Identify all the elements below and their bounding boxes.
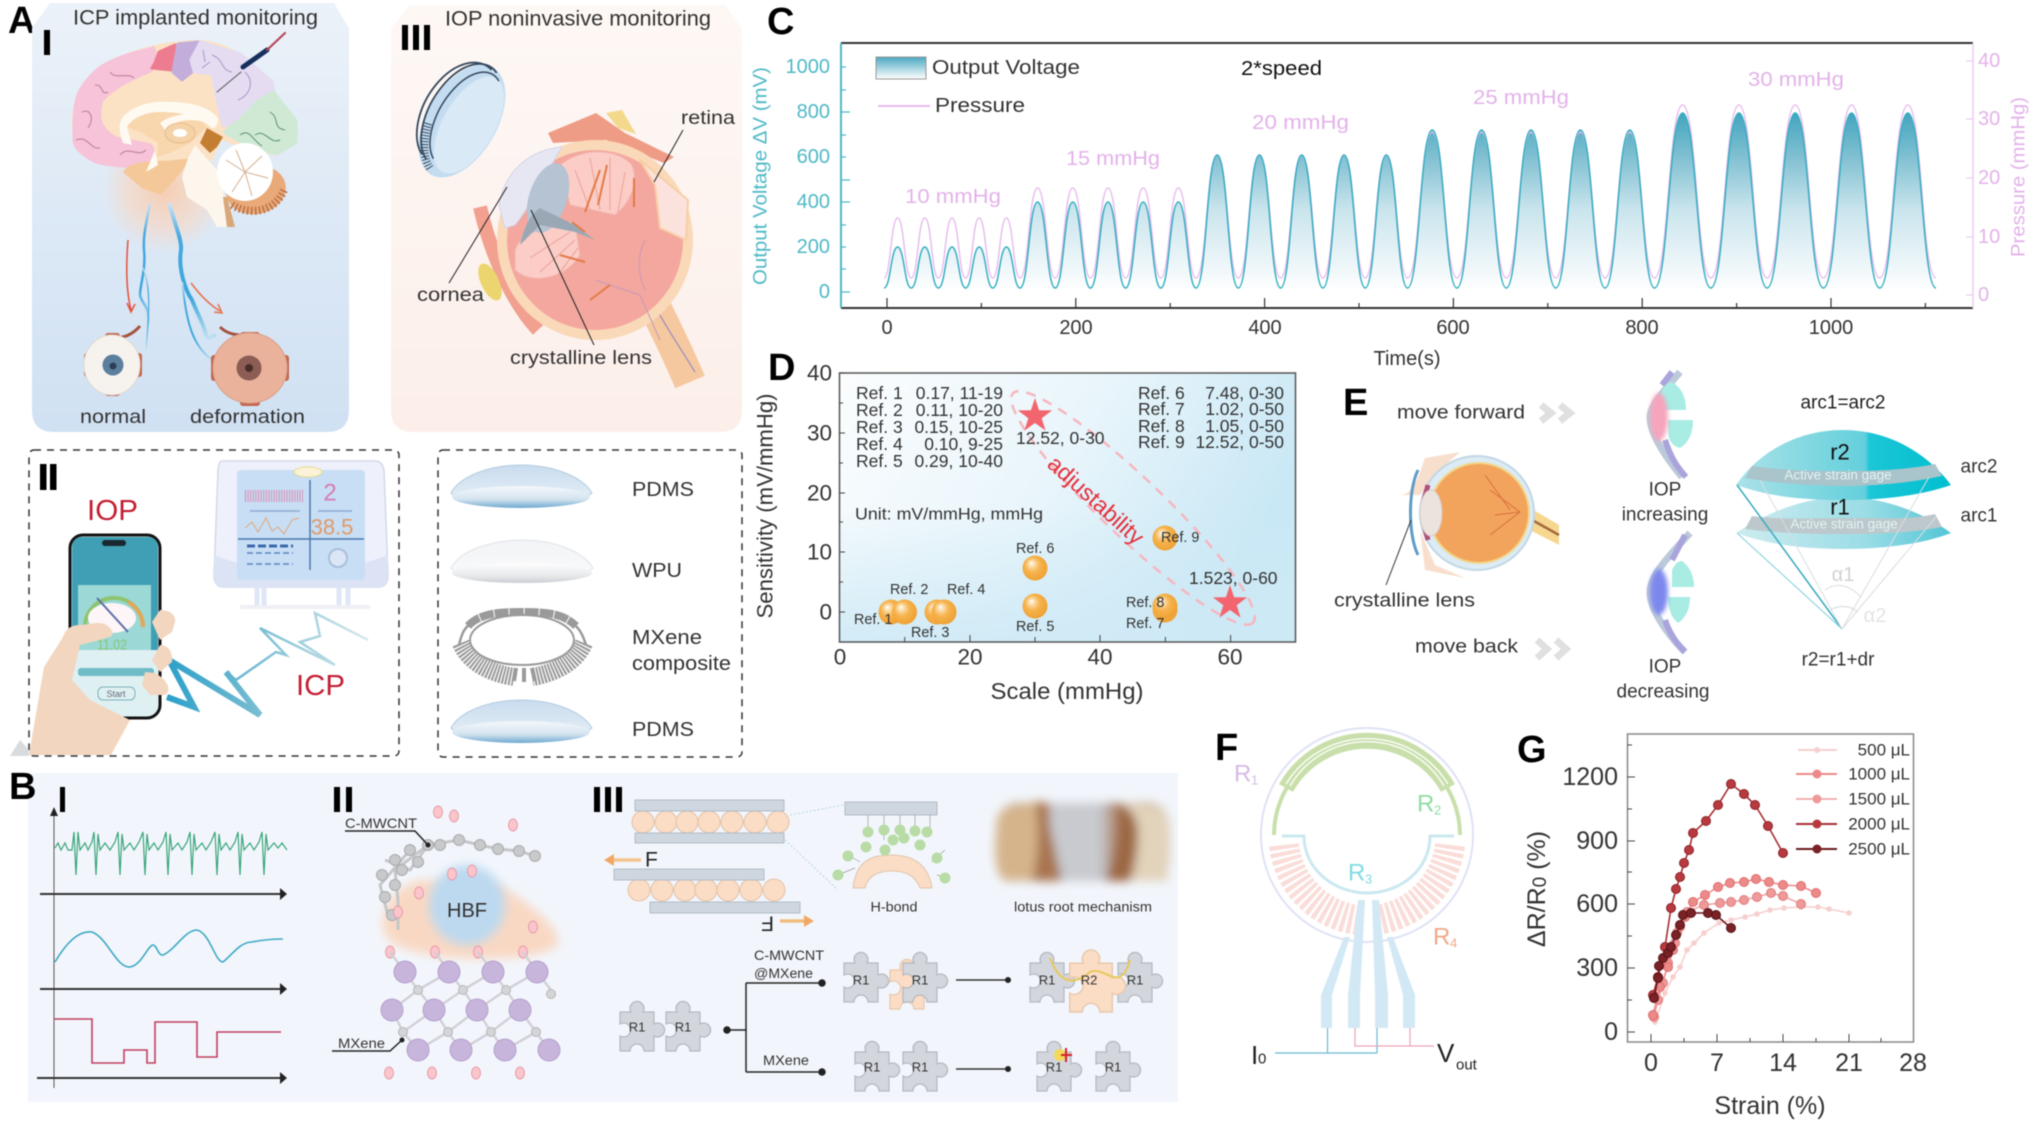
label: I0: 0	[1258, 1050, 1266, 1068]
icon: PDMS bottom layer	[451, 700, 592, 743]
label: R3: 3	[1365, 872, 1372, 886]
tree connector	[724, 980, 825, 1075]
puzzle: MXene state	[855, 1041, 948, 1091]
hydroxyl groups	[384, 806, 538, 1079]
panel: B-III self-healing mechanism	[594, 787, 1170, 1091]
labels: R1	[629, 1020, 691, 1034]
puzzle: healed R1-R2-R1 state: R1	[1127, 972, 1143, 988]
x-axis tick labels: 60	[1217, 644, 1243, 670]
reference table left: Ref. 2	[856, 400, 903, 420]
shape: arc2 strain band	[1745, 464, 1942, 486]
R3 blue gauge	[1282, 836, 1454, 893]
axis ticks	[840, 373, 1231, 642]
reference table right: Ref. 7	[1138, 399, 1185, 419]
label: composite: composite	[632, 653, 731, 675]
axes frame	[841, 43, 1973, 308]
y-axis tick labels: 30	[807, 420, 832, 446]
panel: A-II layer stack	[438, 450, 742, 757]
label: r2=r1+dr: r2=r1+dr	[1802, 650, 1875, 670]
y-axis title: ΔR/R	[1523, 887, 1551, 947]
series: 500 uL	[1655, 907, 1849, 1022]
label: MXene: MXene	[763, 1052, 809, 1068]
star: this work 1.523	[1213, 585, 1247, 618]
heading: ICP implanted monitoring: ICP implanted monitoring	[73, 6, 318, 30]
legend: 1000 μL	[1848, 764, 1910, 784]
label: II	[40, 464, 56, 490]
voltage line	[884, 113, 1936, 288]
label: I	[60, 787, 65, 812]
legend	[1796, 740, 1910, 858]
label: IOP increasing: increasing	[1622, 504, 1708, 526]
panel label: B: B	[9, 766, 36, 808]
x-axis tick labels: 20	[957, 644, 983, 670]
x-axis ticks: 0	[881, 317, 893, 339]
reference table left: Ref. 1	[856, 383, 903, 403]
panel background	[32, 3, 349, 432]
y-axis tick labels: 300	[1576, 954, 1618, 982]
icon: eye cross-section	[1400, 452, 1559, 578]
dashed adjustability ellipse	[992, 372, 1274, 644]
panel: A-II wireless readout	[10, 450, 399, 756]
right axis ticks	[1978, 50, 2000, 306]
x-axis tick labels: 14	[1769, 1049, 1797, 1077]
lead traces	[1321, 900, 1415, 1028]
label: Vout	[1437, 1038, 1478, 1074]
C-MWCNT atoms	[376, 834, 540, 930]
label: IOP increasing: IOP	[1649, 480, 1681, 500]
icon: brain	[72, 40, 297, 227]
panel: C output voltage chart	[750, 43, 2030, 370]
y-axis tick labels: 600	[1576, 890, 1618, 918]
y-axis tick labels: 0	[819, 600, 832, 624]
puzzle: healed R1-R2-R1 state: R2	[1081, 972, 1097, 988]
x-axis tick labels: 40	[1087, 644, 1113, 670]
series: 1500 uL	[1654, 893, 1801, 1017]
diagram: intact bilayer	[632, 800, 789, 843]
label: II	[334, 787, 352, 812]
x-axis tick labels	[834, 644, 1243, 670]
axis arrow	[40, 983, 287, 995]
y-axis tick labels: 900	[1576, 827, 1618, 855]
left axis ticks	[786, 56, 830, 303]
label: MXene: MXene	[632, 627, 702, 649]
legend: 2000 μL	[1848, 814, 1910, 834]
zoom guide lines	[785, 805, 843, 890]
puzzle: MXene state: R1	[864, 1060, 880, 1074]
label: PDMS: PDMS	[632, 479, 694, 501]
legend: 500 μL	[1858, 740, 1910, 760]
reference table right: Ref. 8	[1138, 416, 1185, 436]
label: crystalline lens: crystalline lens	[510, 347, 652, 369]
chart: red step trace	[54, 1019, 281, 1063]
axis arrow	[37, 1072, 287, 1084]
dashed frame	[438, 450, 742, 757]
label: crystalline lens	[1334, 520, 1475, 612]
R4 pink serpentine right	[1376, 845, 1450, 920]
chart: blue slow-wave trace	[55, 930, 283, 967]
label: R2: 2	[1434, 802, 1441, 818]
arrow: force left	[604, 854, 641, 866]
diagram: H-bond detail	[832, 802, 950, 888]
sphere labels: Ref. 3	[911, 625, 949, 641]
value: 38.5: 38.5	[311, 514, 353, 540]
panel: B-II hydrogen-bond molecular structure	[332, 787, 560, 1079]
pressure level labels: 30 mmHg	[1748, 69, 1844, 91]
label: IOP increasing	[1622, 480, 1708, 526]
x-axis tick labels: 21	[1835, 1049, 1863, 1077]
chart: green ECG trace	[55, 832, 287, 875]
label: I0: I	[1251, 1040, 1258, 1070]
label: alpha 1: α1	[1832, 564, 1854, 586]
pressure level labels: 10 mmHg	[905, 186, 1001, 208]
panel label: F: F	[1215, 727, 1238, 769]
puzzle: healed R1-R2-R1 state: R1	[1039, 972, 1055, 988]
legend: output voltage	[876, 57, 1080, 79]
blue HBF cloud	[429, 865, 505, 945]
reference table left: Ref. 5	[856, 451, 903, 471]
label: alpha 2: α2	[1864, 605, 1886, 627]
label: MXene	[332, 1035, 404, 1051]
panel label: G: G	[1517, 729, 1547, 771]
label: IOP decreasing	[1617, 656, 1709, 702]
label: inverted F: F	[761, 912, 774, 934]
arrow: red flow left	[127, 240, 135, 312]
icon: phone app	[70, 535, 160, 718]
left axis ticks: 600	[797, 146, 830, 168]
sphere labels: Ref. 4	[947, 582, 985, 598]
label: HBF: HBF	[447, 900, 487, 922]
left axis ticks: 200	[797, 236, 830, 258]
label: 2*speed: 2*speed	[1241, 58, 1322, 80]
left axis ticks: 0	[819, 281, 830, 303]
shape: arc1 lens	[1736, 497, 1951, 549]
legend: 2500 μL	[1848, 840, 1910, 858]
diagram: sheared bilayer	[614, 869, 800, 913]
puzzle: intact R1 pair	[620, 1001, 711, 1051]
label: Vout: out	[1456, 1056, 1478, 1074]
arrow	[956, 1066, 1011, 1072]
reference table left: 0.17, 11-19	[916, 383, 1003, 403]
x-axis title: Scale (mmHg)	[990, 678, 1144, 704]
series: 2000 uL	[1653, 784, 1783, 995]
y-axis tick labels	[807, 360, 832, 624]
label: H-bond: H-bond	[870, 900, 918, 914]
icon: small corner mark	[10, 740, 29, 756]
reference table right	[1138, 383, 1284, 452]
label: III	[594, 787, 622, 812]
label: MXene: MXene	[338, 1035, 385, 1051]
sphere labels: Ref. 6	[1016, 541, 1054, 557]
label: lotus root mechanism: lotus root mechanism	[1014, 900, 1152, 914]
x-axis tick labels: 28	[1899, 1049, 1927, 1077]
reference table right: Ref. 9	[1138, 432, 1185, 452]
puzzle: MXene state: R1	[912, 1060, 928, 1074]
label: F: F	[645, 848, 658, 872]
label: R2: R	[1417, 790, 1434, 818]
shape: arc1 strain band	[1745, 514, 1942, 534]
axis ticks	[1628, 745, 1881, 1042]
strain label lower: Active strain gage	[1790, 516, 1898, 532]
pressure level labels: 15 mmHg	[1066, 148, 1160, 170]
x-axis ticks: 200	[1059, 317, 1093, 339]
labels: R1: R1	[629, 1020, 645, 1034]
label: PDMS: PDMS	[632, 719, 694, 741]
icon: eye anatomy cross-section	[473, 110, 695, 382]
panel: B mechanism background	[28, 773, 1178, 1102]
R4 pink serpentine left	[1284, 845, 1358, 920]
panel label: A: A	[8, 0, 35, 42]
label: cornea	[417, 187, 507, 306]
label: cornea: cornea	[417, 284, 484, 306]
legend: 1500 μL	[1848, 790, 1910, 808]
brain glow	[103, 128, 227, 252]
label: Vout: V	[1437, 1038, 1455, 1068]
y-axis tick labels: 20	[807, 480, 832, 506]
panel: F sensor layout	[1234, 728, 1478, 1074]
photo: lotus root	[995, 801, 1170, 881]
dashed frame	[29, 450, 399, 756]
label: R3: R	[1348, 860, 1365, 886]
strain diagram	[1736, 430, 1951, 629]
right axis ticks: 40	[1978, 50, 2000, 72]
label: C-MWCNT: C-MWCNT	[345, 815, 417, 831]
label: R4: R	[1433, 924, 1450, 950]
panel: E eye mechanism	[1334, 372, 1997, 702]
label: R1: R	[1234, 760, 1251, 788]
sphere labels: Ref. 1	[854, 612, 892, 628]
label: r1: r1	[1830, 494, 1850, 520]
nerve pathways	[140, 203, 216, 361]
sphere labels: Ref. 5	[1016, 619, 1054, 635]
y-axis tick labels: 0	[1604, 1018, 1618, 1046]
reference table right: 1.02, 0-50	[1205, 399, 1284, 419]
arrow	[956, 977, 1011, 983]
sphere labels: Ref. 9	[1161, 530, 1199, 546]
sphere labels: Ref. 8	[1126, 595, 1164, 611]
label: crystalline lens	[510, 210, 652, 369]
right axis ticks: 30	[1978, 108, 2000, 130]
y-axis tick labels	[1562, 763, 1618, 1046]
label: crystalline lens: crystalline lens	[1334, 590, 1475, 612]
x-axis tick labels: 0	[1644, 1049, 1658, 1077]
panel label: E: E	[1343, 382, 1368, 424]
label: R4: 4	[1450, 936, 1457, 950]
label: r2: r2	[1830, 440, 1850, 464]
label: III	[402, 25, 430, 50]
adjustability label: adjustability	[1043, 450, 1150, 550]
label: arc1: arc1	[1961, 506, 1997, 526]
reference table left: 0.15, 10-25	[914, 417, 1003, 437]
x-axis ticks: 1000	[1809, 317, 1853, 339]
voltage area fill	[884, 113, 1936, 288]
panel: B-I signal traces	[37, 787, 287, 1088]
label: retina	[654, 107, 735, 182]
label: I0	[1251, 1040, 1266, 1070]
icon: deformed eye	[211, 327, 289, 406]
plot frame	[1628, 734, 1914, 1042]
x-axis ticks: 600	[1436, 317, 1470, 339]
strain label upper: Active strain gage	[1784, 468, 1892, 482]
orange interaction cloud	[382, 880, 558, 959]
series: 2500 uL	[1654, 913, 1731, 998]
puzzle: broken state	[1037, 1041, 1141, 1091]
sphere labels: Ref. 2	[890, 582, 928, 598]
reference table left	[856, 383, 1003, 471]
sphere labels	[854, 530, 1199, 641]
series: 1000 uL	[1653, 879, 1816, 1015]
MXene lattice atoms	[381, 961, 560, 1061]
icon: electrode	[217, 33, 285, 92]
value: pressure readout: 11.02	[97, 636, 127, 654]
label: arc2: arc2	[1961, 456, 1997, 478]
left axis ticks: 800	[797, 101, 830, 123]
pressure line	[884, 105, 1936, 278]
chevrons	[1541, 405, 1570, 421]
chevrons	[1537, 640, 1566, 658]
label: ICP: ICP	[296, 670, 345, 702]
axis: vertical	[50, 807, 58, 1088]
x-axis tick labels: 0	[834, 644, 846, 670]
callout: 12.52, 0-30: 12.52, 0-30	[1016, 428, 1105, 448]
x-axis tick labels: 7	[1710, 1049, 1724, 1077]
icon: bedside monitor	[214, 461, 388, 609]
icon: PDMS top layer	[451, 465, 592, 508]
callout: 1.523, 0-60: 1.523, 0-60	[1189, 568, 1278, 588]
right axis ticks: 0	[1978, 284, 1989, 306]
panel: A-III IOP noninvasive monitoring	[391, 5, 742, 432]
label: normal: normal	[80, 406, 146, 428]
x-axis ticks: 400	[1248, 317, 1282, 339]
button: Start: Start	[106, 689, 126, 699]
y-axis tick labels: 1200	[1562, 763, 1618, 791]
reference table left: 0.11, 10-20	[916, 400, 1003, 420]
y-axis tick labels: 40	[807, 360, 832, 386]
legend: output voltage: Output Voltage	[932, 57, 1080, 79]
x-axis title: Strain (%)	[1714, 1092, 1826, 1120]
y-axis tick labels: 10	[807, 540, 832, 564]
icon: MXene composite serpentine ring	[459, 612, 586, 682]
R2 green gauge	[1274, 739, 1460, 835]
label: IOP decreasing: IOP	[1649, 656, 1681, 678]
label: R1: 1	[1251, 772, 1258, 788]
x-axis ticks: 800	[1625, 317, 1659, 339]
panel: A-I ICP implanted monitoring	[32, 3, 349, 432]
reference table right: 12.52, 0-50	[1195, 432, 1284, 452]
panel label: D: D	[768, 347, 795, 389]
reference table left: 0.29, 10-40	[914, 451, 1003, 471]
axis arrow	[40, 888, 287, 900]
chart line: waveform signal	[167, 613, 368, 715]
labels: R1: R1	[675, 1020, 691, 1034]
legend: pressure: Pressure	[935, 95, 1025, 117]
puzzle: C-MWCNT@MXene state: R1	[912, 972, 928, 988]
y-axis title: 0	[1530, 877, 1550, 887]
circuit: current loop	[1275, 1028, 1377, 1053]
panel label: C: C	[767, 1, 794, 43]
right axis ticks: 10	[1978, 226, 2000, 248]
label: arc1=arc2: arc1=arc2	[1800, 392, 1886, 414]
panel: G resistance vs strain chart	[1523, 734, 1927, 1120]
puzzle: C-MWCNT@MXene state	[844, 952, 948, 1009]
sphere labels: Ref. 7	[1126, 616, 1164, 632]
left axis ticks: 1000	[786, 56, 830, 78]
arrow: force right	[780, 915, 814, 927]
puzzle: broken state: R1	[1105, 1060, 1121, 1074]
right axis ticks: 20	[1978, 167, 2000, 189]
puzzle: broken state: R1	[1046, 1060, 1062, 1074]
value: 2: 2	[323, 480, 337, 506]
right axis title: Pressure (mmHg)	[2008, 97, 2030, 257]
icon: WPU layer	[451, 540, 593, 583]
icon: cornea under increasing IOP	[1650, 372, 1693, 477]
data spheres	[878, 526, 1178, 624]
pressure level labels: 25 mmHg	[1473, 87, 1569, 109]
label: retina: retina	[681, 107, 735, 129]
label: IOP decreasing: decreasing	[1617, 682, 1709, 702]
label: C-MWCNT @MXene: @MXene	[754, 965, 813, 981]
label: C-MWCNT	[345, 815, 430, 848]
heading: IOP noninvasive monitoring: IOP noninvasive monitoring	[445, 8, 711, 30]
puzzle: C-MWCNT@MXene state: R1	[853, 972, 869, 988]
circuit: voltage loop	[1355, 1028, 1434, 1046]
reference table right: Ref. 6	[1138, 383, 1185, 403]
icon: cornea under decreasing IOP	[1650, 533, 1694, 652]
reference table left: 0.10, 9-25	[924, 434, 1003, 454]
x-axis ticks	[881, 317, 1853, 339]
icon: normal eye	[84, 326, 142, 396]
reference table left: Ref. 4	[856, 434, 903, 454]
pressure level labels: 20 mmHg	[1252, 112, 1349, 134]
reference table left: Ref. 3	[856, 417, 903, 437]
star: this work 12.52	[1018, 398, 1052, 431]
icon: smart contact lens	[395, 46, 523, 192]
label: C-MWCNT @MXene	[754, 947, 824, 981]
arrow: red flow right	[191, 283, 222, 313]
panel: D sensitivity vs scale chart	[752, 360, 1296, 704]
MXene lattice bonds	[390, 952, 551, 1050]
label: deformation: deformation	[190, 406, 305, 428]
y-axis title: (%)	[1523, 831, 1551, 877]
left axis ticks: 400	[797, 191, 830, 213]
label: move back: move back	[1415, 636, 1519, 658]
label: IOP: IOP	[87, 495, 138, 527]
outer ring	[1261, 728, 1473, 942]
shape: arc2 lens	[1736, 430, 1951, 500]
reference table right: 7.48, 0-30	[1205, 383, 1284, 403]
label: WPU: WPU	[632, 560, 682, 582]
radius lines	[1737, 477, 1936, 629]
reference table right: 1.05, 0-50	[1205, 416, 1284, 436]
label: I	[44, 30, 50, 55]
label: move forward: move forward	[1397, 402, 1525, 424]
plot background	[840, 373, 1296, 642]
x-axis tick labels	[1644, 1049, 1927, 1077]
panel background	[391, 5, 742, 432]
puzzle: healed R1-R2-R1 state	[1030, 950, 1163, 1012]
icon: hand holding phone	[29, 610, 175, 755]
pressure level labels	[905, 69, 1844, 208]
x-axis title: Time(s)	[1373, 348, 1441, 370]
left axis title: Output Voltage ΔV (mV)	[750, 67, 772, 285]
label: C-MWCNT @MXene: C-MWCNT	[754, 947, 824, 963]
unit note: Unit: mV/mmHg, mmHg	[855, 504, 1043, 524]
y-axis title: Sensitivity (mV/mmHg)	[752, 393, 778, 619]
